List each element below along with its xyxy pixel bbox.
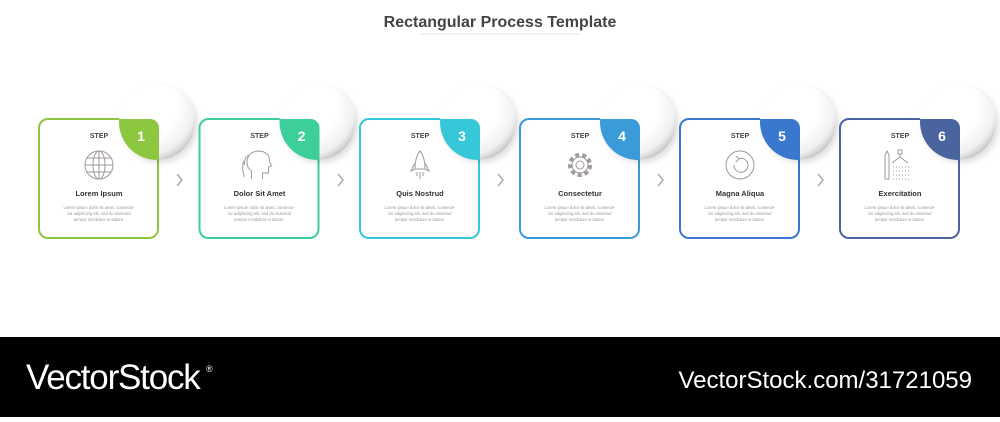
footer bar — [0, 337, 1000, 417]
step 1: Lorem Ipsum — [75, 189, 123, 198]
arrow — [658, 174, 663, 186]
step 4 — [520, 84, 676, 238]
step 6: 6 — [938, 128, 946, 144]
step 1 — [39, 84, 195, 238]
step 5: 5 — [778, 128, 786, 144]
arrow — [338, 174, 343, 186]
step 2 — [200, 84, 356, 238]
icon: rocket — [411, 151, 429, 179]
step 1: tur adipiscing elit, sed do eiusmod — [67, 211, 131, 216]
step 5: STEP — [731, 133, 749, 140]
title: Rectangular Process Template — [384, 14, 616, 31]
step 2: STEP — [250, 133, 269, 140]
icon: pencil and shower — [885, 150, 911, 179]
step 6: tur adipiscing elit, sed do eiusmod — [868, 211, 932, 216]
step 1: 1 — [137, 128, 145, 144]
footer bar: VectorStock — [26, 358, 201, 397]
step 3: tempor incididunt ut labore. — [395, 217, 445, 222]
step 6: Lorem ipsum dolor sit amet, consecte- — [865, 205, 936, 210]
icon: heads — [243, 151, 272, 179]
arrow — [498, 174, 503, 186]
step 2: tur adipiscing elit, sed do eiusmod — [228, 211, 292, 216]
step 4: tur adipiscing elit, sed do eiusmod — [548, 211, 612, 216]
step 4: Lorem ipsum dolor sit amet, consecte- — [545, 205, 616, 210]
step 5: Lorem ipsum dolor sit amet, consecte- — [705, 205, 776, 210]
step 6: tempor incididunt ut labore. — [875, 217, 925, 222]
step 3: Quis Nostrud — [396, 189, 444, 198]
step 2: Lorem ipsum dolor sit amet, consecte- — [224, 205, 296, 210]
step 3: Lorem ipsum dolor sit amet, consecte- — [385, 205, 456, 210]
step 1: STEP — [90, 133, 108, 140]
step 3: STEP — [411, 133, 429, 140]
step 3: 3 — [458, 128, 466, 144]
step 1: tempor incididunt ut labore. — [74, 217, 124, 222]
step 2: Dolor Sit Amet — [234, 189, 286, 198]
step 2: 2 — [298, 128, 306, 144]
step 4: Consectetur — [558, 189, 602, 198]
icon: globe — [85, 151, 113, 179]
arrow — [818, 174, 823, 186]
footer bar: VectorStock.com/31721059 — [678, 367, 972, 394]
step 5: Magna Aliqua — [716, 189, 765, 198]
arrow — [177, 174, 182, 186]
step 6 — [840, 84, 996, 238]
step 3 — [360, 84, 516, 238]
icon: gear — [570, 155, 590, 175]
step 5: tempor incididunt ut labore. — [715, 217, 765, 222]
icon: refresh — [726, 151, 754, 179]
step 5: tur adipiscing elit, sed do eiusmod — [708, 211, 772, 216]
step 4: 4 — [618, 128, 626, 144]
step 4: tempor incididunt ut labore. — [555, 217, 605, 222]
step 6: STEP — [891, 133, 909, 140]
step 2: tempor incididunt ut labore. — [234, 217, 285, 222]
step 5 — [680, 84, 836, 238]
footer bar: ® — [206, 364, 213, 374]
step 1: Lorem ipsum dolor sit amet, consecte- — [64, 205, 135, 210]
step 3: tur adipiscing elit, sed do eiusmod — [388, 211, 452, 216]
step 4: STEP — [571, 133, 589, 140]
step 6: Exercitation — [879, 189, 922, 198]
